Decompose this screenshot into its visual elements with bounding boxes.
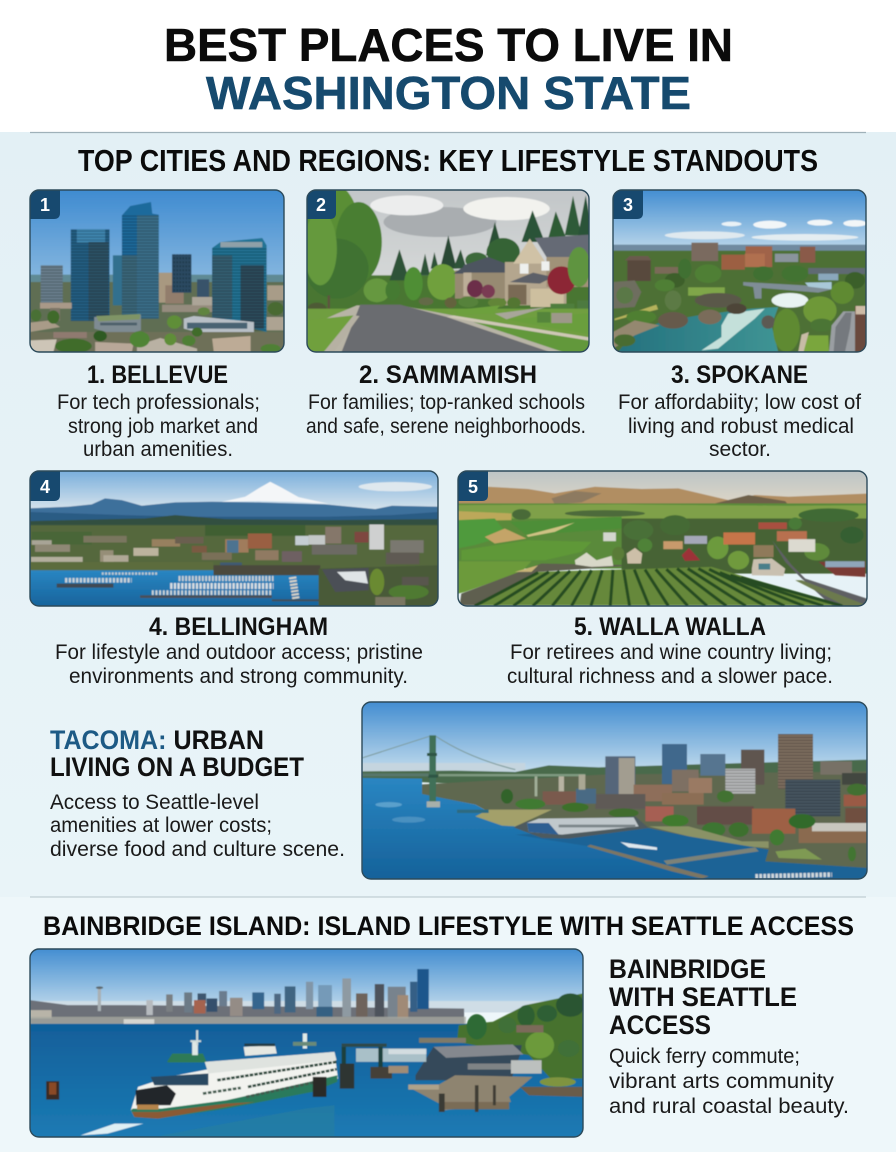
photo: Sammamish neighborhood	[308, 190, 588, 352]
city name: Bellingham: 4. BELLINGHAM	[149, 613, 328, 641]
description: Tacoma: diverse food and culture scene.	[50, 838, 345, 861]
city name: Bellevue: 1. BELLEVUE	[87, 361, 228, 389]
photo: Spokane falls	[610, 187, 870, 354]
photo: Tacoma waterfront and bridge	[359, 699, 870, 881]
description: Walla Walla: For retirees and wine country living;	[510, 641, 832, 664]
badge: 1: 1	[40, 195, 50, 215]
panel: Spokane	[610, 187, 870, 461]
city name: Spokane: 3. SPOKANE	[671, 361, 808, 389]
panel: Bellevue	[27, 187, 287, 461]
description: Spokane	[618, 391, 861, 461]
title: BEST PLACES TO LIVE IN	[164, 19, 733, 71]
description: Bellevue: urban amenities.	[83, 438, 233, 461]
panel: Sammamish	[299, 182, 593, 438]
subheading: Bainbridge: ACCESS	[609, 1010, 711, 1040]
panel: Bellingham	[27, 468, 441, 688]
description: Bainbridge	[609, 1045, 849, 1118]
description: Sammamish: For families; top-ranked schools	[308, 391, 585, 414]
badge: 2	[307, 190, 336, 219]
heading: Tacoma: LIVING ON A BUDGET	[50, 752, 304, 782]
city name: Walla Walla: 5. WALLA WALLA	[574, 613, 766, 641]
description: Bainbridge: and rural coastal beauty.	[609, 1095, 849, 1118]
heading: Tacoma	[50, 725, 304, 782]
subheading: Bainbridge: BAINBRIDGE	[609, 954, 766, 984]
title	[164, 19, 733, 119]
description: Bellingham: For lifestyle and outdoor access; pristine	[55, 641, 423, 664]
description: Bellevue: For tech professionals;	[57, 391, 260, 414]
description: Spokane: sector.	[709, 438, 771, 461]
description: Bellingham: environments and strong community.	[69, 665, 408, 688]
subheading: Bainbridge	[609, 954, 797, 1040]
panel: Tacoma	[50, 699, 870, 881]
description: Tacoma: amenities at lower costs;	[50, 814, 272, 837]
description: Bainbridge: Quick ferry commute;	[609, 1045, 800, 1068]
badge: 4: 4	[40, 477, 50, 497]
description: Sammamish: and safe, serene neighborhoods.	[306, 415, 586, 438]
badge: 5: 5	[468, 477, 478, 497]
description: Spokane: For affordabiity; low cost of	[618, 391, 861, 414]
badge: 5	[458, 471, 488, 501]
description: Bainbridge: vibrant arts community	[609, 1070, 835, 1093]
badge: 4	[30, 471, 60, 501]
badge: 3	[613, 190, 643, 219]
heading: Tacoma: TACOMA: URBAN	[50, 725, 264, 755]
heading: Bainbridge Island: BAINBRIDGE ISLAND: ISLAND LIFESTYLE WITH SEATTLE ACCESS	[43, 911, 854, 941]
photo: Bellingham harbor and Mount Baker	[27, 468, 441, 609]
description: Walla Walla: cultural richness and a slower pace.	[507, 665, 833, 688]
description: Tacoma: Access to Seattle-level	[50, 791, 259, 814]
badge: 2: 2	[316, 195, 326, 215]
description: Sammamish	[306, 391, 586, 438]
badge: 1	[30, 190, 60, 219]
title: WASHINGTON STATE	[206, 67, 691, 119]
photo: Walla Walla vineyards	[455, 468, 870, 606]
description: Bellevue: strong job market and	[68, 415, 258, 438]
badge: 3: 3	[623, 195, 633, 215]
description: Walla Walla	[507, 641, 833, 688]
description: Bellevue	[57, 391, 260, 461]
description: Bellingham	[55, 641, 423, 688]
subheading: Bainbridge: WITH SEATTLE	[609, 982, 797, 1012]
photo: Bellevue skyline	[27, 187, 287, 357]
panel: Bainbridge Island	[26, 946, 849, 1139]
photo: ferry and Seattle skyline	[26, 946, 587, 1139]
description: Spokane: living and robust medical	[628, 415, 854, 438]
description: Tacoma	[50, 791, 345, 861]
panel: Walla Walla	[455, 468, 870, 688]
city name: Sammamish: 2. SAMMAMISH	[359, 361, 537, 389]
